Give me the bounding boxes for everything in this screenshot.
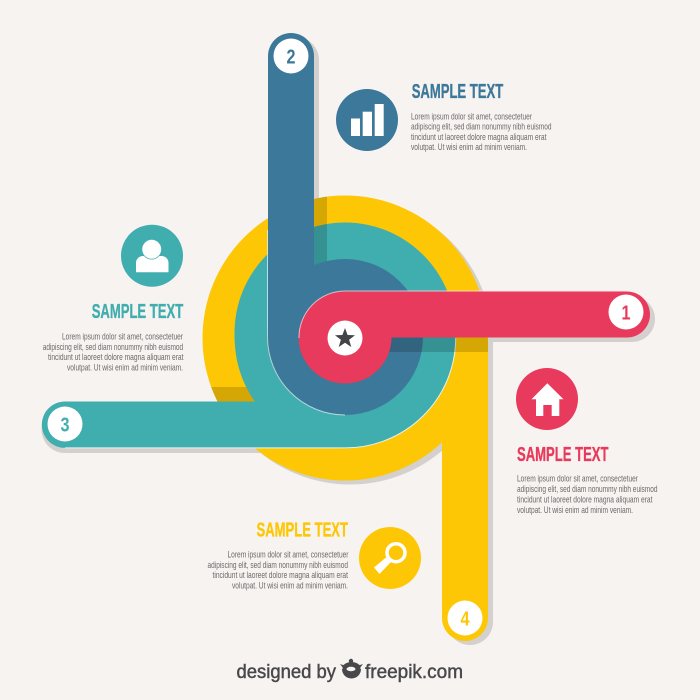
text block: bottom <box>208 520 348 592</box>
teal ribbon 3 <box>42 222 456 448</box>
body text: tincidunt ut laoreet dolore magna aliquam erat <box>48 352 184 363</box>
body text <box>208 550 348 592</box>
number badge 4: 4 <box>460 608 470 630</box>
number badge 1 <box>608 294 644 330</box>
heading: SAMPLE TEXT <box>517 444 608 466</box>
body text: tincidunt ut laoreet dolore magna aliquam erat <box>212 570 348 581</box>
body text <box>517 474 658 516</box>
heading: SAMPLE TEXT <box>412 81 503 103</box>
icon: freepik logo <box>340 659 363 678</box>
yellow ribbon 4 <box>202 196 488 641</box>
body text: Lorem ipsum dolor sit amet, consectetuer <box>517 474 638 485</box>
blue ribbon highlight <box>268 230 345 415</box>
number badge 3 <box>48 406 82 442</box>
number badge 1: 1 <box>622 302 630 324</box>
number badge 3: 3 <box>60 414 70 436</box>
text block: right <box>517 444 658 516</box>
icon: bar chart <box>336 89 398 151</box>
body text: Lorem ipsum dolor sit amet, consectetuer <box>411 112 532 122</box>
shadow of blue ribbon <box>314 196 327 266</box>
body text: volutpat. Ut wisi enim ad minim veniam. <box>232 581 348 592</box>
heading: SAMPLE TEXT <box>256 520 348 542</box>
number badge 2: 2 <box>286 46 296 68</box>
body text: adipiscing elit, sed diam nonummy nibh euismod <box>43 342 183 353</box>
red ribbon highlight <box>299 291 627 338</box>
drop shadows <box>41 37 655 645</box>
footer credit <box>236 659 463 683</box>
body text: Lorem ipsum dolor sit amet, consectetuer <box>62 332 183 342</box>
body text: volutpat. Ut wisi enim ad minim veniam. <box>517 505 633 516</box>
teal ribbon highlight <box>65 338 456 448</box>
number badge 4 <box>448 600 482 636</box>
body text: adipiscing elit, sed diam nonummy nibh euismod <box>411 122 552 133</box>
body text <box>411 112 552 153</box>
body text: Lorem ipsum dolor sit amet, consectetuer <box>228 550 348 561</box>
blue ribbon 2 <box>267 33 423 415</box>
number badge 2 <box>274 38 308 74</box>
icon: user <box>121 225 183 287</box>
shadow of red ribbon <box>385 337 489 352</box>
footer credit: freepik.com <box>365 662 463 683</box>
icon: house <box>516 368 578 430</box>
red ribbon 1 <box>298 292 650 383</box>
icon: magnifier <box>359 527 421 589</box>
footer credit: designed by <box>236 662 336 683</box>
shadow of teal ribbon on yellow <box>211 387 255 402</box>
body text <box>43 332 184 374</box>
text block: left <box>43 301 184 374</box>
body text: volutpat. Ut wisi enim ad minim veniam. <box>411 142 527 153</box>
body text: adipiscing elit, sed diam nonummy nibh euismod <box>208 560 348 571</box>
central spiral diagram <box>41 33 655 645</box>
body text: tincidunt ut laoreet dolore magna aliquam erat <box>411 132 547 143</box>
heading: SAMPLE TEXT <box>92 301 183 323</box>
text block: top right <box>411 81 552 153</box>
star badge <box>328 320 362 356</box>
body text: volutpat. Ut wisi enim ad minim veniam. <box>67 363 183 374</box>
